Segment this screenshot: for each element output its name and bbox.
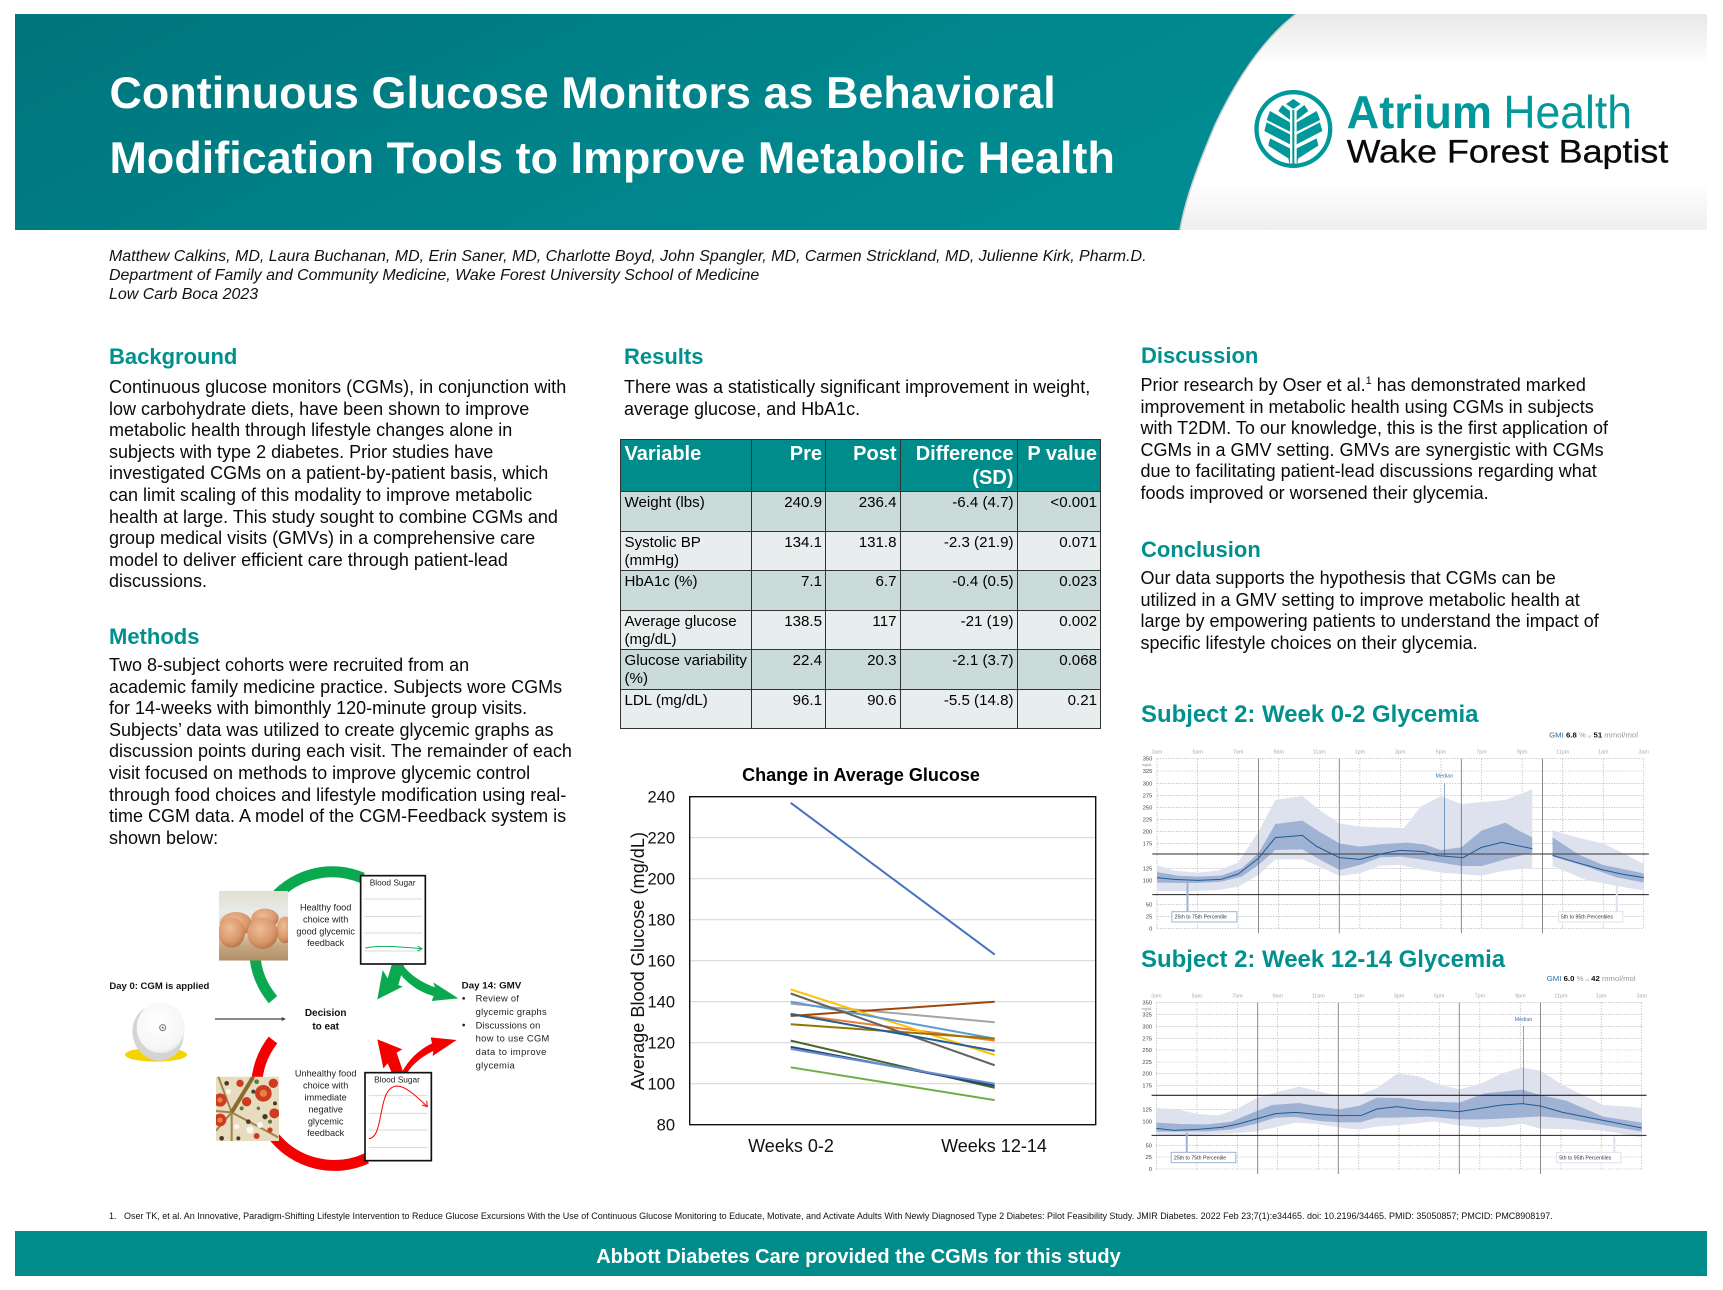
- text: results: There was a statistically significant improvement in weight,: [624, 377, 1090, 397]
- title: Modification Tools to Improve Metabolic Health: [110, 133, 1115, 183]
- 25th to 75th percentile band: [1156, 1090, 1642, 1132]
- text: background: model to deliver efficient care through patient-lead: [109, 550, 508, 570]
- table: results: 236.4: [859, 494, 896, 511]
- text: discussion: due to facilitating patient-lead discussions regarding what: [1140, 461, 1597, 481]
- x axis labels: Weeks 0-2: [748, 1136, 834, 1156]
- glucose axis: 325: [1142, 1013, 1152, 1019]
- legend: interquartile: 25th to 75th Percentile: [1174, 1155, 1226, 1161]
- table: results: 22.4: [793, 652, 822, 669]
- text: results: [624, 377, 1090, 419]
- authors and affiliation: Department of Family and Community Medicine, Wake Forest University School of Medicine: [109, 267, 759, 284]
- table: results: 20.3: [867, 652, 896, 669]
- glucose axis: 250: [1142, 1048, 1152, 1054]
- table: results: 0.071: [1059, 534, 1097, 550]
- time axis: [1151, 993, 1648, 999]
- header banner: [15, 14, 1707, 230]
- table: results: 0.023: [1059, 573, 1097, 590]
- text: background: can limit scaling of this modality to improve metabolic: [109, 485, 532, 505]
- authors and affiliation: Low Carb Boca 2023: [109, 286, 258, 303]
- heading: Subject 2 week 0-2: Subject 2: Week 0-2 Glycemia: [1141, 701, 1478, 728]
- time axis: 1pm: [1354, 993, 1365, 999]
- glucose axis: 300: [1143, 781, 1152, 787]
- time axis: 3pm: [1395, 750, 1406, 756]
- 5th to 95th percentile band: [1156, 1068, 1642, 1137]
- table: results: Systolic BP: [624, 534, 701, 550]
- arrow: red to GMV: [402, 1037, 457, 1073]
- text: background: group medical visits (GMVs) in a comprehensive care: [109, 528, 535, 548]
- glucose axis: 50: [1146, 1143, 1152, 1149]
- legend: interquartile: [1172, 882, 1237, 922]
- time axis: 11pm: [1554, 993, 1568, 999]
- table: results: 138.5: [784, 613, 822, 630]
- legend: interquartile: 25th to 75th Percentile: [1175, 915, 1227, 921]
- chart: AGP week 12-14: Median: [1515, 1017, 1532, 1023]
- x axis labels: Weeks 12-14: [941, 1136, 1047, 1156]
- time axis: 7am: [1233, 750, 1244, 756]
- time axis: [1152, 750, 1650, 756]
- image: pizza: [213, 1077, 279, 1141]
- y axis labels: 180: [647, 912, 675, 930]
- table: results: Pre: [790, 443, 822, 465]
- table: results: -2.1 (3.7): [952, 652, 1014, 669]
- y axis labels: 240: [647, 788, 675, 806]
- text: methods: for 14-weeks with bimonthly 120-minute group visits.: [109, 698, 527, 718]
- text: day 14 GMV: Discussions on: [476, 1020, 540, 1030]
- label: decision to eat: Decision: [305, 1008, 347, 1019]
- text: discussion: with T2DM. To our knowledge, this is the first application of: [1140, 418, 1608, 438]
- logo: Atrium Health Wake Forest Baptist: [1254, 86, 1668, 170]
- text: conclusion: specific lifestyle choices on their glycemia.: [1140, 633, 1478, 653]
- text: conclusion: utilized in a GMV setting to improve metabolic health at: [1140, 590, 1580, 610]
- text: methods: visit focused on methods to improve glycemic control: [109, 763, 530, 783]
- table: results: 131.8: [859, 534, 896, 550]
- time axis: 5am: [1192, 993, 1203, 999]
- table: results: Weight (lbs): [624, 494, 705, 511]
- label: decision to eat: to eat: [312, 1021, 340, 1032]
- text: methods: [109, 655, 572, 848]
- chart: AGP week 0-2: mg/dL: [1142, 763, 1152, 767]
- time axis: 11pm: [1556, 750, 1570, 756]
- panel: good blood sugar chart: Blood Sugar: [370, 878, 416, 888]
- glucose axis: 100: [1143, 878, 1152, 884]
- label: unhealthy food: glycemic: [308, 1116, 344, 1126]
- table: results: 6.7: [876, 573, 896, 590]
- text: day 14 GMV: glycemic graphs: [476, 1007, 547, 1017]
- text: results: average glucose, and HbA1c.: [624, 399, 860, 419]
- chart: AGP week 0-2: Median: [1435, 774, 1453, 780]
- label: day 0: Day 0: CGM is applied: [109, 981, 210, 991]
- glucose axis: 275: [1142, 1036, 1152, 1042]
- glucose axis: 275: [1143, 793, 1152, 799]
- time axis: 9pm: [1515, 993, 1526, 999]
- arrow: green to decision: [377, 965, 404, 999]
- text: methods: Two 8-subject cohorts were recruited from an: [109, 655, 469, 675]
- legend: interquartile: [1171, 1133, 1236, 1163]
- label: unhealthy food: feedback: [307, 1128, 345, 1138]
- table: results: (mmHg): [624, 552, 679, 569]
- 25th to 75th percentile band: [1157, 821, 1644, 883]
- glucose axis: 25: [1146, 1155, 1152, 1161]
- chart: AGP week 12-14: [1142, 974, 1648, 1174]
- table: results: -0.4 (0.5): [952, 573, 1014, 590]
- glucose axis: 200: [1143, 830, 1152, 836]
- time axis: 3am: [1151, 993, 1162, 999]
- chart: AGP week 12-14: mg/dL: [1142, 1007, 1152, 1011]
- median line: [1157, 783, 1644, 880]
- text: methods: shown below:: [109, 828, 218, 848]
- time axis: 3am: [1639, 750, 1650, 756]
- text: background: low carbohydrate diets, have been shown to improve: [109, 399, 529, 419]
- median line: [1156, 1026, 1642, 1130]
- glucose axis: 50: [1146, 902, 1152, 908]
- heading: Discussion: Discussion: [1141, 343, 1258, 368]
- y axis labels: 100: [647, 1076, 675, 1094]
- title: [110, 68, 1115, 183]
- time axis: 3am: [1152, 750, 1163, 756]
- arrow: red to decision: [377, 1039, 403, 1073]
- label: healthy food: feedback: [307, 938, 345, 948]
- y axis labels: 220: [647, 830, 675, 848]
- text: methods: discussion points during each visit. The remainder of each: [109, 741, 572, 761]
- time axis: 1am: [1596, 993, 1607, 999]
- logo wordmark: Atrium: [1347, 86, 1492, 138]
- y axis labels: 140: [647, 994, 675, 1012]
- title: Continuous Glucose Monitors as Behavioral: [110, 68, 1056, 118]
- glucose axis: 225: [1143, 817, 1152, 823]
- icon: CGM sensor: [125, 999, 191, 1067]
- panel: poor blood sugar chart: Blood Sugar: [374, 1075, 420, 1085]
- arrow: green to GMV: [398, 965, 458, 1001]
- text: methods: through food choices and lifestyle modification using real-: [109, 785, 566, 805]
- footnote: 1. Oser TK, et al. An Innovative, Paradigm-Shifting Lifestyle Intervention to Reduce Glucose Excursions With the Use of Continuous Glucose Monitoring to Educate, Motivate, and Activate Adults With Newly Diagnosed Type 2 Diabetes: Pilot Feasibility Study. JMIR Diabetes. 2022 Feb 23;7(1):e34465. doi: 10.2196/34465. PMID: 35050857; PMCID: PMC8908197.: [109, 1211, 1553, 1221]
- logo wordmark: [1347, 86, 1668, 170]
- glucose axis: 225: [1142, 1060, 1152, 1066]
- diagram: CGM feedback system: [109, 866, 549, 1171]
- text: day 14 GMV: Review of: [476, 994, 519, 1004]
- glucose axis: 250: [1143, 805, 1152, 811]
- panel: poor blood sugar chart: [365, 1073, 431, 1161]
- heading: Results: Results: [624, 344, 703, 369]
- time axis: 5am: [1192, 750, 1203, 756]
- time axis: 7am: [1232, 993, 1243, 999]
- table: results: 96.1: [793, 692, 822, 709]
- table: results: -5.5 (14.8): [944, 692, 1014, 709]
- time axis: 5pm: [1434, 993, 1445, 999]
- legend: 5th to 95th: [1557, 1137, 1621, 1163]
- chart: AGP week 0-2: [1142, 730, 1650, 934]
- y axis labels: [647, 788, 675, 1134]
- glucose axis: 175: [1143, 842, 1152, 848]
- table: results: (SD): [972, 467, 1014, 489]
- text: day 14 GMV: how to use CGM: [476, 1034, 549, 1044]
- table: results: (mg/dL): [624, 631, 677, 648]
- heading: Subject 2 week 12-14: Subject 2: Week 12-14 Glycemia: [1141, 946, 1505, 973]
- panel: good blood sugar chart: [361, 876, 425, 964]
- table: results: -21 (19): [961, 613, 1014, 630]
- time axis: 7pm: [1475, 993, 1486, 999]
- label: healthy food: Healthy food: [300, 903, 351, 913]
- table: results: 240.9: [784, 494, 822, 511]
- table: results: (%): [624, 670, 648, 687]
- time axis: 9am: [1272, 993, 1283, 999]
- table: results: 0.068: [1059, 652, 1097, 669]
- label: healthy food: good glycemic: [296, 927, 355, 937]
- glucose axis: 200: [1142, 1072, 1152, 1078]
- text: discussion: foods improved or worsened their glycemia.: [1140, 483, 1489, 503]
- table: results: 90.6: [867, 692, 896, 709]
- table: results: -2.3 (21.9): [944, 534, 1014, 550]
- footer bar: [15, 1231, 1707, 1276]
- logo wordmark: Health: [1503, 86, 1632, 138]
- red feedback arc: [257, 1040, 367, 1165]
- glucose axis: 100: [1142, 1119, 1152, 1125]
- text: background: metabolic health through lifestyle changes alone in: [109, 420, 512, 440]
- text: background: health at large. This study sought to combine CGMs and: [109, 507, 558, 527]
- table: results: P value: [1027, 443, 1097, 465]
- label: unhealthy food: immediate: [305, 1093, 347, 1103]
- chart: change in average glucose: [628, 765, 1096, 1156]
- glucose axis: 350: [1142, 1001, 1152, 1007]
- time axis: 7pm: [1476, 750, 1487, 756]
- glucose axis: 175: [1142, 1084, 1152, 1090]
- heading: Conclusion: Conclusion: [1141, 537, 1261, 562]
- data lines: [791, 803, 995, 1100]
- text: day 14 GMV: glycemia: [476, 1060, 515, 1070]
- y axis labels: 80: [657, 1116, 675, 1134]
- legend: 5th to 95th: [1559, 885, 1623, 922]
- label: unhealthy food: choice with: [303, 1081, 348, 1091]
- table: results: Difference: [916, 443, 1014, 465]
- icon: tree leaf emblem: [1256, 92, 1330, 166]
- glucose axis: 325: [1143, 769, 1152, 775]
- table: results: Variable: [624, 443, 701, 465]
- text: methods: Subjects’ data was utilized to create glycemic graphs as: [109, 720, 554, 740]
- table: results: 134.1: [784, 534, 822, 550]
- heading: Background: Background: [109, 344, 237, 369]
- time axis: 11am: [1313, 750, 1326, 756]
- glucose axis: 350: [1143, 757, 1152, 763]
- glucose axis: 300: [1142, 1024, 1152, 1030]
- GMI readout: GMI 6.8 % or 51 mmol/mol: [1549, 730, 1638, 739]
- arrow: CGM to decision: [215, 1017, 283, 1021]
- table: results: Glucose variability: [624, 652, 747, 669]
- x axis labels: [748, 1136, 1047, 1156]
- table: results: 117: [872, 613, 896, 630]
- authors and affiliation: [109, 248, 1147, 303]
- text: methods: time CGM data. A model of the CGM-Feedback system is: [109, 806, 566, 826]
- y axis title: Average Blood Glucose (mg/dL): [628, 832, 648, 1090]
- text: conclusion: Our data supports the hypothesis that CGMs can be: [1140, 568, 1556, 588]
- y axis labels: 120: [647, 1034, 675, 1052]
- text: methods: academic family medicine practice. Subjects wore CGMs: [109, 677, 562, 697]
- time axis: 3am: [1636, 993, 1648, 999]
- time axis: 1am: [1598, 750, 1609, 756]
- legend: 5th to 95th: 5th to 95th Percentiles: [1559, 1155, 1612, 1161]
- chart title: Change in Average Glucose: [742, 765, 980, 785]
- y axis labels: 200: [647, 870, 675, 888]
- table: results: Average glucose: [624, 613, 737, 630]
- table: results: HbA1c (%): [624, 573, 697, 590]
- text: discussion: CGMs in a GMV setting. GMVs are synergistic with CGMs: [1140, 440, 1604, 460]
- time axis: 5pm: [1436, 750, 1447, 756]
- label: unhealthy food: negative: [308, 1105, 343, 1115]
- text: day 14 GMV: data to improve: [476, 1047, 546, 1057]
- authors and affiliation: Matthew Calkins, MD, Laura Buchanan, MD, Erin Saner, MD, Charlotte Boyd, John Spangler, MD, Carmen Strickland, MD, Julienne Kirk, Pharm.D.: [109, 248, 1147, 265]
- glucose axis: 125: [1142, 1107, 1152, 1113]
- time axis: 9am: [1273, 750, 1285, 756]
- table: results: -6.4 (4.7): [952, 494, 1014, 511]
- 5th to 95th percentile band: [1157, 789, 1644, 891]
- GMI readout: GMI 6.0 % or 42 mmol/mol: [1547, 974, 1636, 983]
- table: results: <0.001: [1050, 494, 1097, 511]
- time axis: 9pm: [1517, 750, 1528, 756]
- heading: Methods: Methods: [109, 624, 199, 649]
- label: healthy food: choice with: [303, 915, 348, 925]
- image: eggs: [218, 891, 293, 961]
- text: conclusion: [1140, 568, 1599, 653]
- text: background: Continuous glucose monitors (CGMs), in conjunction with: [109, 377, 566, 397]
- legend: 5th to 95th: 5th to 95th Percentiles: [1561, 915, 1613, 921]
- glucose axis: 0: [1149, 1167, 1152, 1173]
- text: conclusion: large by empowering patients to understand the impact of: [1140, 611, 1599, 631]
- time axis: 3pm: [1394, 993, 1405, 999]
- table: results: [620, 439, 1101, 729]
- time axis: 11am: [1312, 993, 1325, 999]
- text: background: discussions.: [109, 571, 207, 591]
- table: results: 0.21: [1068, 692, 1097, 709]
- time axis: 1pm: [1355, 750, 1366, 756]
- plot frame: [690, 797, 1096, 1125]
- label: unhealthy food: Unhealthy food: [295, 1069, 356, 1079]
- glucose axis: 25: [1146, 914, 1152, 920]
- glucose axis: 125: [1143, 866, 1152, 872]
- logo wordmark: Wake Forest Baptist: [1347, 134, 1668, 170]
- text: background: investigated CGMs on a patient-by-patient basis, which: [109, 463, 548, 483]
- glucose axis: [1143, 757, 1152, 933]
- text: discussion: Prior research by Oser et al.1 has demonstrated marked: [1140, 375, 1586, 395]
- table: results: Post: [853, 443, 896, 465]
- text: background: subjects with type 2 diabetes. Prior studies have: [109, 442, 493, 462]
- footer bar: Abbott Diabetes Care provided the CGMs for this study: [596, 1246, 1121, 1268]
- glucose axis: [1142, 1001, 1152, 1173]
- table: results: LDL (mg/dL): [624, 692, 708, 709]
- green feedback arc: [255, 872, 363, 1000]
- text: day 14 GMV: Day 14: GMV: [462, 981, 522, 991]
- y axis labels: 160: [647, 952, 675, 970]
- table: results: 0.002: [1059, 613, 1097, 630]
- table: results: 7.1: [801, 573, 822, 590]
- glucose axis: 0: [1149, 927, 1152, 933]
- text: day 14 GMV: [462, 981, 549, 1070]
- text: discussion: improvement in metabolic health using CGMs in subjects: [1140, 397, 1594, 417]
- text: background: [109, 377, 566, 591]
- text: discussion: [1140, 375, 1608, 503]
